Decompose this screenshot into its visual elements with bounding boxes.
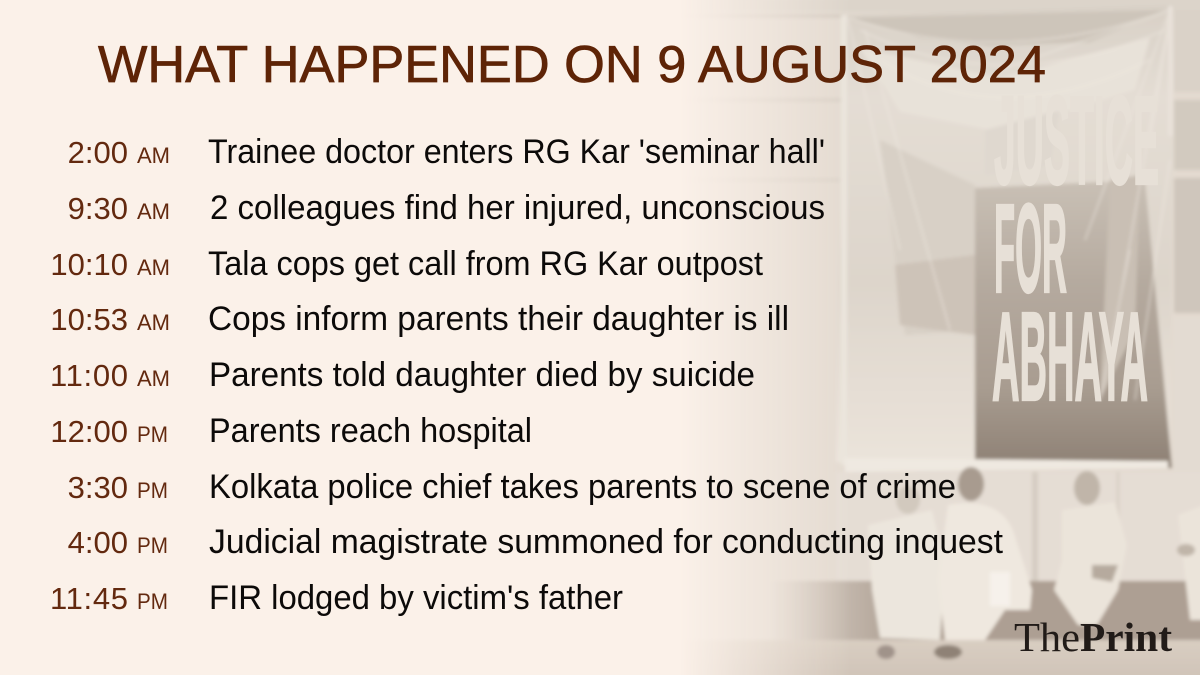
dark lower part of banner	[975, 180, 1172, 468]
time 3:30 PM: 3:30	[68, 470, 128, 505]
title: WHAT HAPPENED ON 9 AUGUST 2024	[98, 36, 1046, 94]
timeline: times	[50, 135, 170, 616]
officers	[958, 467, 984, 501]
officer shoes	[877, 645, 895, 659]
time 2:00 AM	[68, 135, 170, 170]
time 11:45 PM	[50, 581, 168, 616]
time 4:00 PM	[68, 525, 168, 560]
event 9: FIR lodged by victim's father	[209, 579, 623, 617]
logo: ThePrint: The	[1014, 614, 1080, 660]
time 10:10 AM	[50, 247, 170, 282]
logo: ThePrint	[1014, 614, 1172, 660]
time 4:00 PM: 4:00	[68, 525, 128, 560]
time 9:30 AM: 9:30	[68, 191, 128, 226]
time 11:00 AM	[50, 358, 170, 393]
wall	[734, 11, 1200, 640]
event 6: Parents reach hospital	[209, 412, 532, 450]
event 2: 2 colleagues find her injured, unconscious	[210, 189, 825, 227]
time 12:00 PM: 12:00	[50, 414, 128, 449]
time 9:30 AM: AM	[137, 199, 170, 224]
logo: ThePrint: Print	[1080, 614, 1172, 660]
time 4:00 PM: PM	[137, 533, 168, 558]
time 12:00 PM: PM	[137, 422, 168, 447]
time 2:00 AM: AM	[137, 143, 170, 168]
event 4: Cops inform parents their daughter is ill	[208, 300, 789, 338]
time 10:53 AM	[50, 302, 170, 337]
banner bottom pole	[845, 458, 1168, 472]
cloth fold lines	[930, 18, 1154, 400]
faded photo: protest banner and police officers	[706, 0, 1200, 675]
time 10:53 AM: 10:53	[50, 302, 128, 337]
event 3: Tala cops get call from RG Kar outpost	[208, 245, 764, 283]
time 11:00 AM: 11:00	[50, 358, 128, 393]
lower wall	[836, 472, 1200, 582]
officer at right edge	[1184, 578, 1200, 622]
time 11:00 AM: AM	[137, 366, 170, 391]
time 11:45 PM: PM	[137, 589, 168, 614]
event 7: Kolkata police chief takes parents to scene of crime	[209, 468, 956, 506]
time 9:30 AM	[68, 191, 170, 226]
time 12:00 PM	[50, 414, 168, 449]
event 8: Judicial magistrate summoned for conducting inquest	[209, 523, 1004, 561]
timeline: events	[208, 133, 1004, 617]
event 5: Parents told daughter died by suicide	[209, 356, 755, 394]
event 1: Trainee doctor enters RG Kar 'seminar hall'	[208, 133, 825, 171]
banner cloth	[849, 15, 1166, 458]
dark bench band	[770, 581, 1200, 643]
top fold shading	[850, 10, 1165, 46]
time 10:10 AM: 10:10	[50, 247, 128, 282]
ground	[739, 638, 1200, 675]
time 2:00 AM: 2:00	[68, 135, 128, 170]
time 3:30 PM: PM	[137, 478, 168, 503]
banner slogan	[992, 173, 1148, 402]
time 10:10 AM: AM	[137, 255, 170, 280]
time 3:30 PM	[68, 470, 168, 505]
time 10:53 AM: AM	[137, 310, 170, 335]
time 11:45 PM: 11:45	[50, 581, 128, 616]
